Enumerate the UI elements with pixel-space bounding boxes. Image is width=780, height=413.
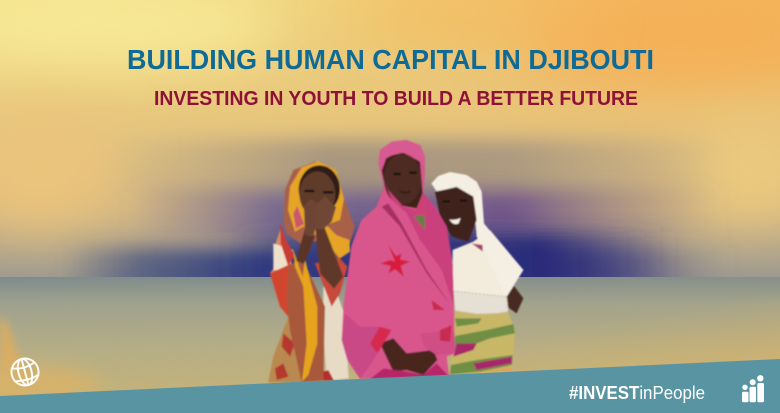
arms and hands xyxy=(296,228,315,264)
background: sunset sky xyxy=(0,0,780,277)
girl on the left xyxy=(268,161,355,382)
icon: World Bank globe xyxy=(8,355,42,389)
flower embroidery xyxy=(380,245,410,277)
girl on the right xyxy=(431,172,523,374)
subtitle: INVESTING IN YOUTH TO BUILD A BETTER FUTURE xyxy=(154,88,638,110)
background: sandy ground xyxy=(0,277,780,395)
icon: people bars xyxy=(742,375,764,402)
title: BUILDING HUMAN CAPITAL IN DJIBOUTI xyxy=(127,44,654,75)
girl in the middle xyxy=(342,140,455,379)
photo: three girls xyxy=(268,140,523,382)
bottom banner xyxy=(0,359,780,413)
hashtag: #INVESTinPeople xyxy=(569,382,705,403)
